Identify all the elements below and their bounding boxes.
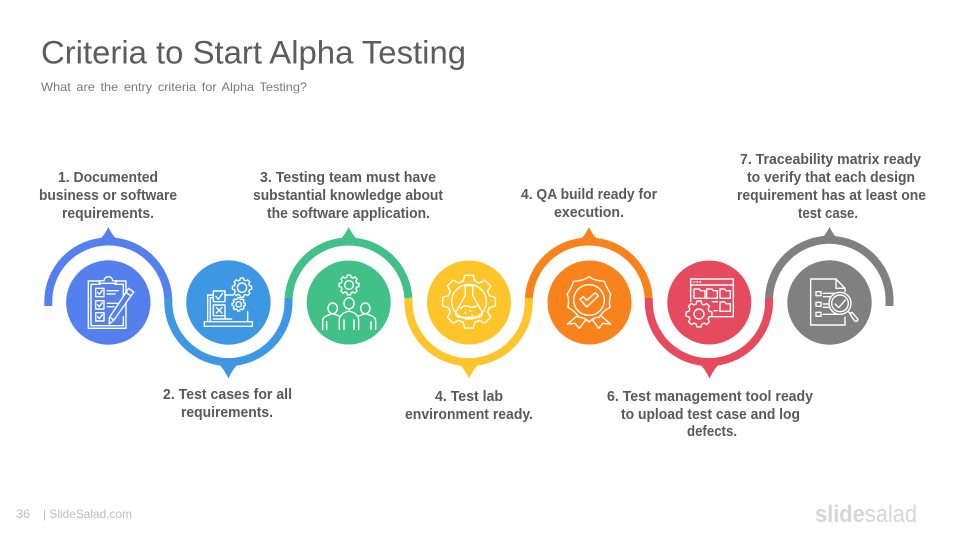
- label 7: 7. Traceability matrix ready: [740, 151, 922, 168]
- circle 3: [307, 260, 391, 344]
- circle 1: [66, 260, 150, 345]
- label 7: test case.: [798, 205, 858, 222]
- arc 1: [48, 241, 168, 306]
- step 4: test lab: [405, 260, 533, 423]
- label 3: 3. Testing team must have: [260, 169, 436, 186]
- label 1: requirements.: [62, 205, 154, 222]
- arc 6: [649, 298, 769, 362]
- arc 7: [769, 240, 890, 306]
- label 5: 4. QA build ready for: [521, 186, 657, 203]
- icon: gear with flask: [443, 275, 495, 328]
- icon: quality badge with check: [567, 277, 611, 328]
- label 3: [253, 169, 443, 222]
- label 5: [521, 186, 657, 221]
- label 7: requirement has at least one: [737, 187, 926, 204]
- arc 5: [529, 241, 649, 298]
- label 2: requirements.: [181, 404, 273, 421]
- icon: clipboard checklist with pencil: [88, 277, 134, 328]
- label 1: business or software: [39, 187, 177, 204]
- title: Criteria to Start Alpha Testing: [41, 34, 466, 70]
- icon: laptop test cases and gears: [204, 278, 252, 326]
- label 7: to verify that each design: [747, 169, 915, 186]
- arc 4: [408, 298, 529, 362]
- circle 2: [186, 260, 271, 345]
- label 1: 1. Documented: [58, 169, 158, 186]
- label 6: 6. Test management tool ready: [607, 388, 814, 405]
- logo wordmark: slidesalad: [815, 501, 917, 528]
- pointer 2: [218, 364, 239, 378]
- icon: document with magnifier: [811, 279, 858, 325]
- pointer 1: [98, 227, 119, 240]
- page number: 36: [16, 507, 30, 521]
- pointer 4: [458, 364, 480, 378]
- label 7: [737, 151, 926, 222]
- label 6: [607, 388, 814, 440]
- pointer 7: [819, 227, 840, 240]
- circle 7: [787, 260, 872, 345]
- label 2: 2. Test cases for all: [163, 386, 292, 403]
- circle 6: [667, 260, 751, 344]
- step 5: QA build: [521, 186, 657, 344]
- label 6: to upload test case and log: [621, 406, 800, 423]
- label 3: substantial knowledge about: [253, 187, 443, 204]
- step 2: test cases: [163, 260, 292, 421]
- icon: team with gear: [323, 275, 376, 329]
- pointer 6: [699, 364, 720, 378]
- label 4: 4. Test lab: [435, 388, 503, 405]
- label 5: execution.: [554, 204, 624, 221]
- label 1: [39, 169, 177, 222]
- label 6: defects.: [687, 423, 737, 440]
- step 3: testing team: [253, 169, 443, 344]
- label 2: [163, 386, 292, 421]
- pointer 3: [338, 227, 359, 240]
- arc 3: [289, 241, 408, 298]
- step 7: traceability matrix: [737, 151, 926, 345]
- subtitle: What are the entry criteria for Alpha Testing?: [41, 80, 307, 94]
- arc 2: [168, 298, 288, 362]
- footer site name: | SlideSalad.com: [43, 507, 132, 521]
- circle 5: [548, 260, 632, 344]
- label 4: [405, 388, 533, 423]
- step 6: test management tool: [607, 260, 814, 440]
- label 4: environment ready.: [405, 406, 533, 423]
- step 1: documented requirements: [39, 169, 177, 345]
- pointer 5: [579, 227, 599, 240]
- label 3: the software application.: [267, 205, 430, 222]
- icon: folders window with gear: [686, 279, 733, 327]
- circle 4: [427, 260, 511, 344]
